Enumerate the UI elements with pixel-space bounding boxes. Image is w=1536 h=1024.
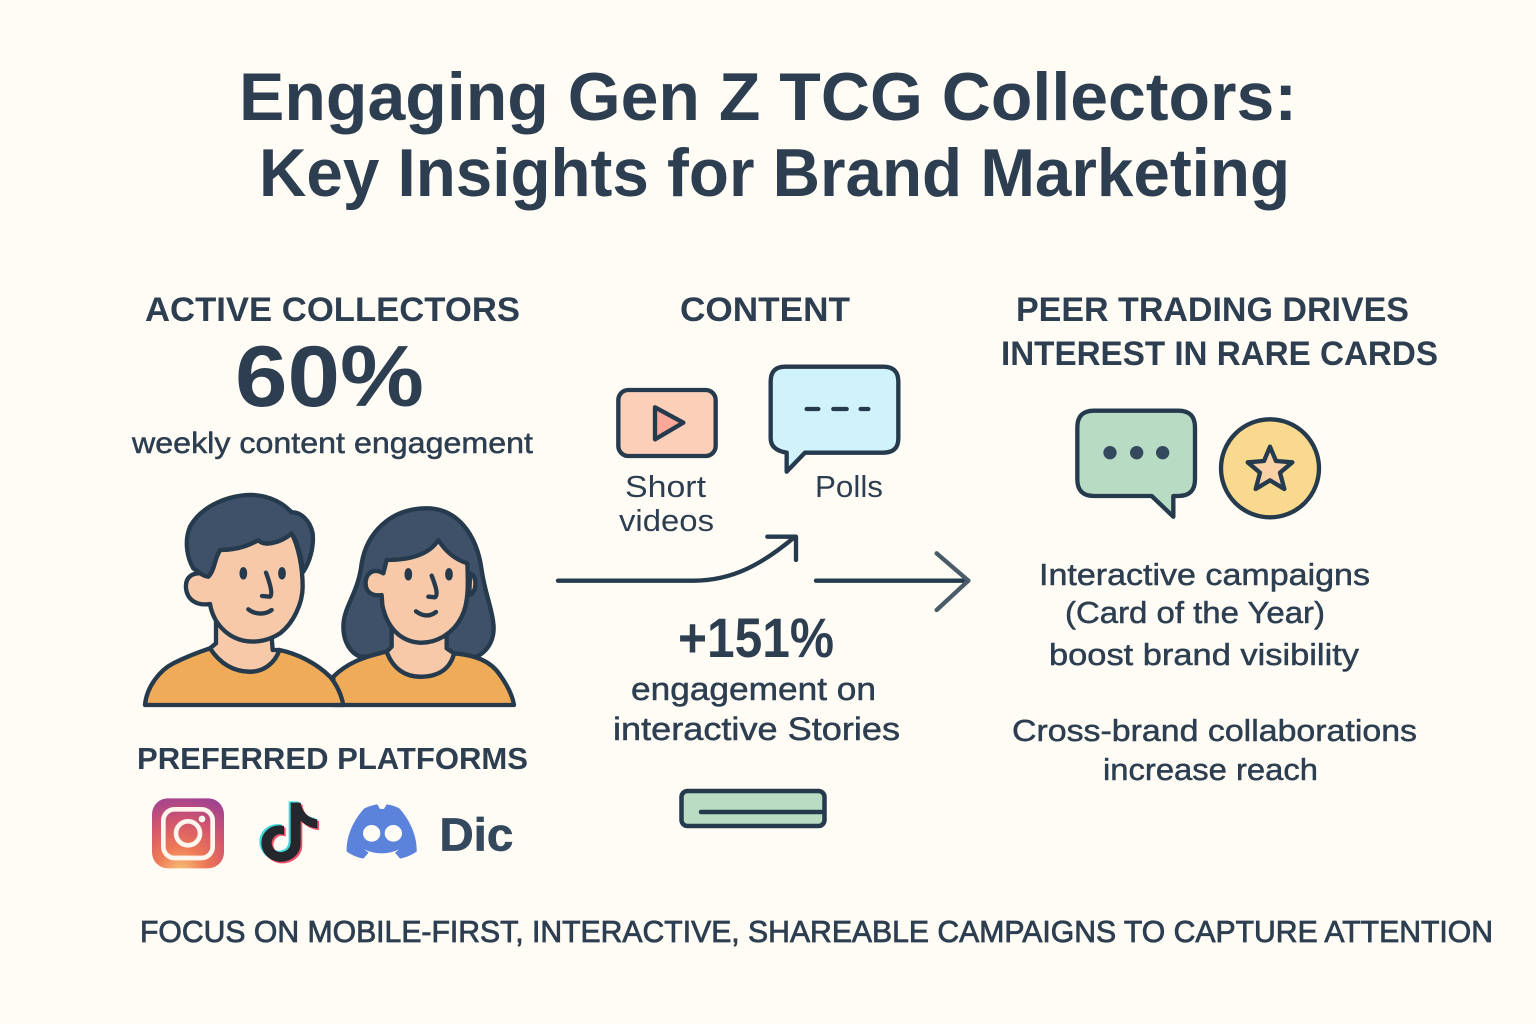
heading: preferred platforms: PREFERRED PLATFORMS [137,741,528,776]
label: polls: Polls [815,469,883,504]
arrow: curved [558,537,796,581]
text: interactive campaigns [1039,557,1370,672]
label: short videos [619,469,714,538]
title: Engaging Gen Z TCG Collectors: [239,59,1297,135]
text: engagement on interactive stories: engagement on [631,671,876,707]
text: interactive campaigns: Interactive campaigns [1039,557,1370,592]
icons: platforms [152,798,513,868]
icon: discord [347,804,417,859]
icon: star badge [1221,419,1319,517]
icon: instagram [152,798,224,868]
arrow: straight [816,553,968,610]
icon: tiktok [259,801,319,863]
text: interactive campaigns: (Card of the Year) [1065,595,1325,630]
heading: active collectors: ACTIVE COLLECTORS [145,291,520,329]
icon: chat bubble [1077,411,1195,517]
label: short videos: videos [619,503,714,538]
man [145,495,343,705]
icon: two collectors [145,495,514,705]
icon: poll bubble [771,367,898,472]
panel: active collectors [131,291,534,868]
stat: +151%: +151% [678,606,834,669]
icon: story bar [682,791,824,826]
label: Dic: Dic [439,808,513,860]
heading: peer trading [1001,291,1438,373]
title [239,59,1297,211]
heading: peer trading: INTEREST IN RARE CARDS [1001,335,1438,373]
text: engagement on interactive stories: interactive Stories [613,711,900,747]
icon: short video [618,390,716,456]
footer callout: FOCUS ON MOBILE-FIRST, INTERACTIVE, SHAREABLE CAMPAIGNS TO CAPTURE ATTENTION [140,914,1493,949]
title: Key Insights for Brand Marketing [259,135,1290,211]
text: weekly content engagement: weekly content engagement [131,427,534,460]
text: cross-brand collaborations: increase reach [1103,752,1318,787]
heading: content: CONTENT [680,291,850,329]
panel: peer trading [1001,291,1438,787]
panel: content [558,291,968,826]
text: cross-brand collaborations [1012,713,1417,787]
text: engagement on interactive stories [613,671,900,747]
woman [333,508,514,705]
heading: peer trading: PEER TRADING DRIVES [1016,291,1409,329]
label: short videos: Short [625,469,706,504]
stat: 60%: 60% [235,329,424,425]
text: interactive campaigns: boost brand visibility [1049,637,1360,672]
text: cross-brand collaborations: Cross-brand collaborations [1012,713,1417,748]
